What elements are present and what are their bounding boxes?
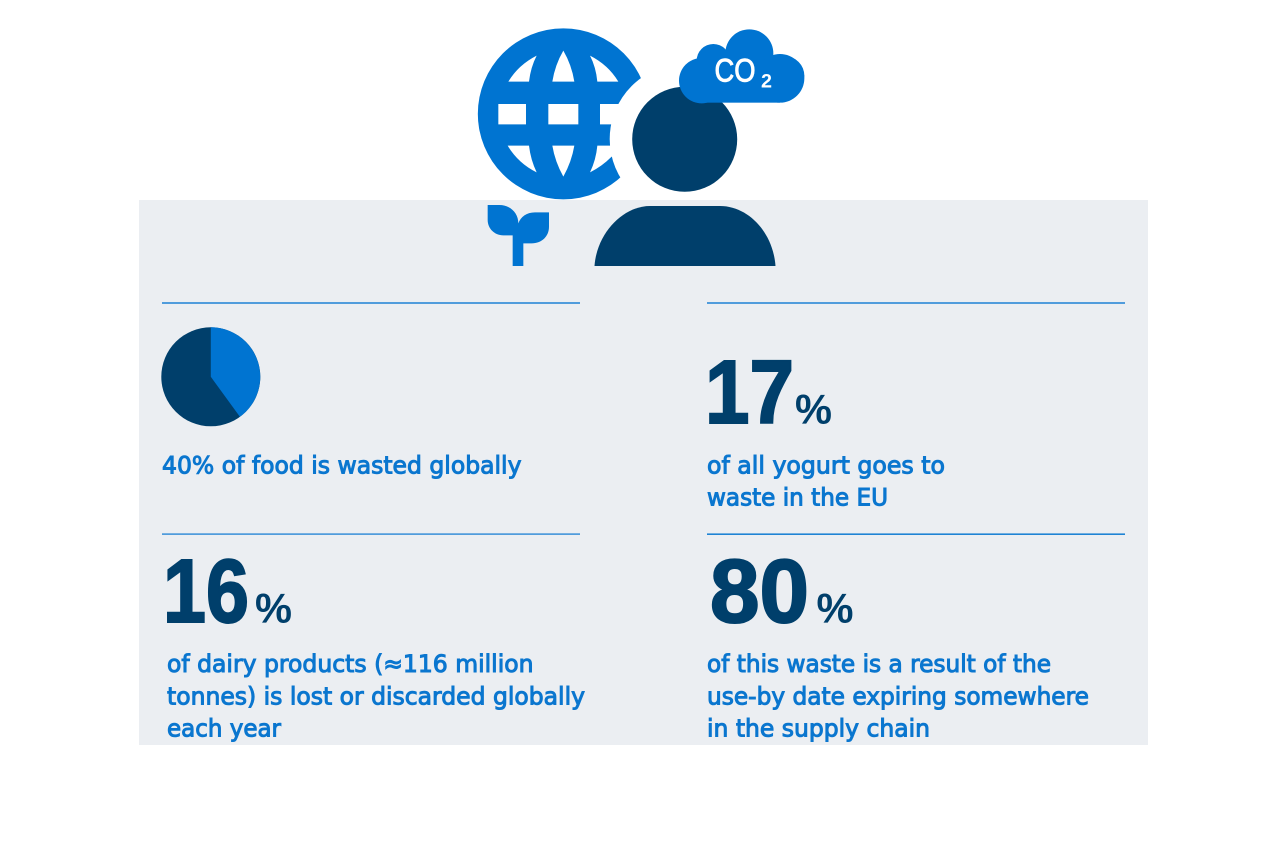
panel: 80 percent stat: of this waste is a result of the (707, 650, 1051, 678)
panel: 16 percent stat (162, 533, 585, 743)
panel: 16 percent stat: 16 (163, 542, 249, 642)
panel: 16 percent stat: of dairy products (≈116 million (167, 650, 534, 678)
panel: 40 percent stat (161, 302, 580, 480)
panel: 16 percent stat: each year (167, 715, 281, 743)
panel: 16 percent stat: tonnes) is lost or discarded globally (167, 682, 585, 710)
panel: 80 percent stat (707, 533, 1125, 743)
panel: 40 percent stat: 40% of food is wasted globally (162, 452, 522, 480)
icon: CO2 cloud: CO (714, 52, 756, 88)
panel: 80 percent stat: 80 (710, 542, 809, 642)
icon: person (594, 87, 776, 266)
panel: background (139, 200, 1148, 745)
icon: CO2 cloud (679, 29, 804, 103)
panel: 80 percent stat: in the supply chain (707, 715, 930, 743)
icon: sprout (488, 205, 549, 266)
panel: 80 percent stat: % (816, 585, 854, 632)
panel: 17 percent stat: % (795, 386, 832, 432)
panel: 17 percent stat (705, 302, 1125, 512)
icon: globe (478, 28, 650, 199)
panel: 80 percent stat: use-by date expiring somewhere (707, 682, 1089, 710)
panel: 16 percent stat: % (255, 585, 292, 632)
icon: CO2 cloud: 2 (761, 72, 772, 92)
panel: 17 percent stat: of all yogurt goes to (707, 452, 945, 480)
panel: 17 percent stat: waste in the EU (707, 484, 888, 512)
pie chart: 40 percent (161, 327, 260, 426)
panel: 17 percent stat: 17 (705, 343, 794, 443)
